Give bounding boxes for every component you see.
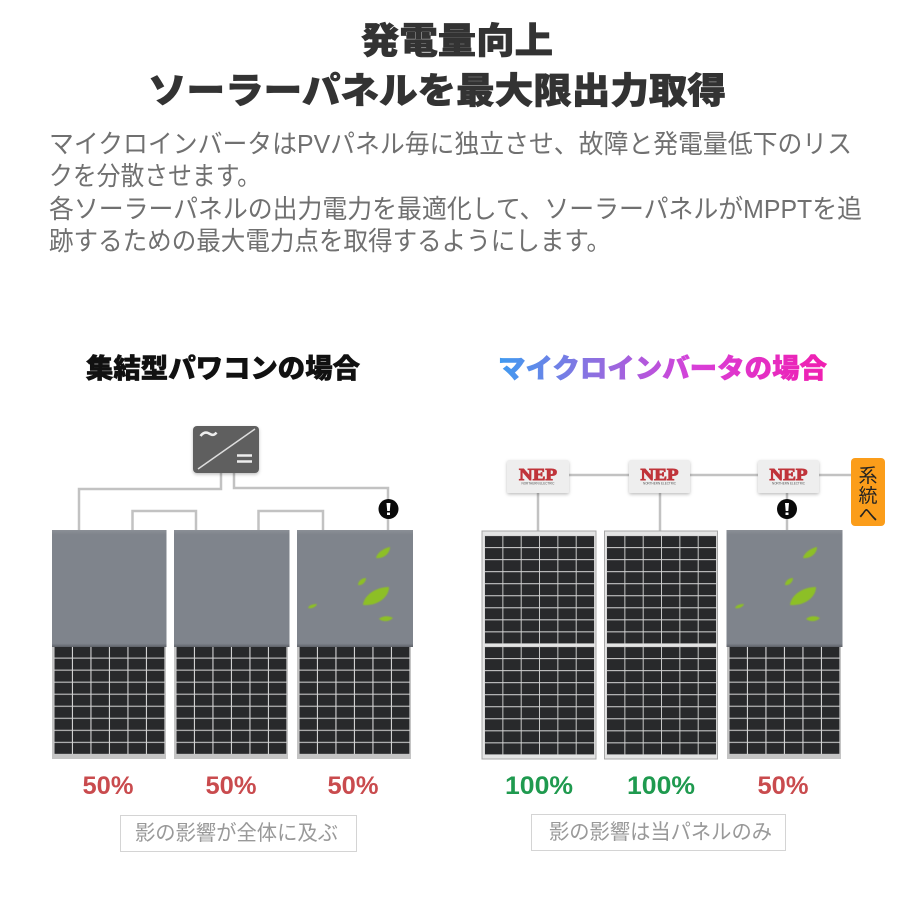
microinverter 3: NORTHERN ELECTRIC [772, 482, 805, 486]
panel 1: shaded string panel [52, 530, 166, 759]
caption: microinverter result: 影の影響は当パネルのみ [549, 821, 772, 844]
label: 100% panel 5: 100% [627, 772, 695, 800]
title: ソーラーパネルを最大限出力取得 [148, 70, 726, 111]
microinverter 2 [629, 460, 690, 493]
label: 100% panel 4: 100% [505, 772, 573, 800]
microinverter 3: NEP [770, 465, 808, 484]
intro text block: クを分散させます。 [49, 161, 261, 191]
warning icon: string [378, 499, 398, 519]
panel 2: shaded string panel [174, 530, 290, 759]
microinverter 1: NORTHERN ELECTRIC [522, 482, 555, 486]
microinverter 2: NORTHERN ELECTRIC [643, 482, 676, 486]
panel 4: unshaded microinverter panel [482, 531, 596, 759]
panel 3: shaded string panel with leaves [297, 530, 413, 759]
warning icon: microinverter [777, 499, 797, 519]
title: 発電量向上 [361, 20, 553, 61]
heading: microinverter: マイクロインバータの場合 [498, 354, 827, 384]
intro text block: マイクロインバータはPVパネル毎に独立させ、故障と発電量低下のリス [49, 129, 852, 159]
intro text block [49, 129, 862, 256]
label: 50% panel 2: 50% [206, 772, 256, 800]
callout: to grid: 系 [858, 465, 878, 487]
title [148, 20, 726, 111]
caption: string result: 影の影響が全体に及ぶ [135, 822, 338, 845]
callout: to grid: へ [858, 505, 878, 526]
heading: string inverter: 集結型パワコンの場合 [86, 354, 360, 384]
label: 50% panel 1: 50% [82, 772, 134, 800]
panel 5: unshaded microinverter panel [604, 531, 718, 759]
caption: string result [120, 816, 356, 852]
panel 6: shaded microinverter panel with leaves [726, 530, 842, 759]
wiring: string inverter [79, 473, 388, 531]
microinverter 2: NEP [640, 465, 678, 484]
caption: microinverter result [532, 814, 786, 850]
label: 50% panel 6: 50% [758, 772, 808, 800]
microinverter 3 [758, 460, 819, 493]
callout: to grid: 統 [858, 485, 878, 507]
microinverter 1 [507, 460, 569, 493]
wiring: microinverter [538, 475, 851, 531]
intro text block: 各ソーラーパネルの出力電力を最適化して、ソーラーパネルがMPPTを追 [49, 194, 862, 224]
icon: leaves [735, 547, 820, 621]
icon: central inverter [193, 426, 259, 473]
intro text block: 跡するための最大電力点を取得するようにします。 [49, 226, 611, 256]
microinverter 1: NEP [519, 465, 557, 484]
callout: to grid [851, 458, 885, 526]
icon: leaves [308, 547, 393, 621]
label: 50% panel 3: 50% [328, 772, 378, 800]
